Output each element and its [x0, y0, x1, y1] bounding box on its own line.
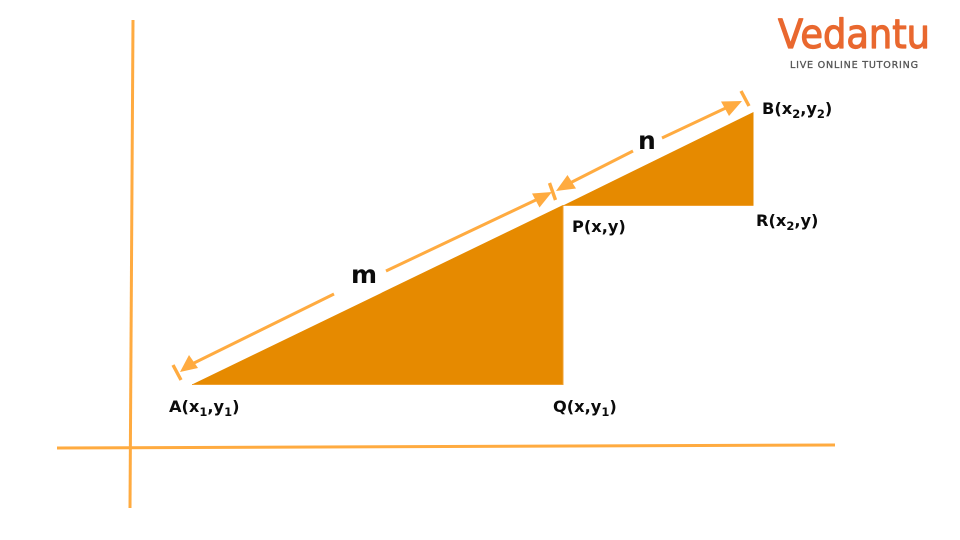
y axis — [130, 20, 133, 508]
arrow: length n — [556, 91, 749, 191]
label A: 1 — [199, 405, 207, 419]
label m: m — [351, 260, 377, 289]
large triangle APQ — [192, 205, 563, 384]
label R: R(x — [756, 211, 786, 230]
small triangle PBR — [563, 112, 754, 206]
label A: ) — [232, 397, 240, 416]
logo wordmark: Vedantu — [778, 12, 930, 58]
x axis — [57, 445, 835, 448]
label A: ,y — [207, 397, 225, 416]
triangle edge highlights — [192, 206, 754, 384]
label B: ) — [825, 99, 832, 118]
label B: B(x — [762, 99, 792, 118]
label Q: Q(x,y — [553, 397, 601, 416]
label Q: 1 — [601, 405, 609, 419]
arrow: length m — [173, 183, 556, 380]
label B: ,y — [800, 99, 817, 118]
label R: 2 — [786, 219, 794, 233]
label R: ,y) — [794, 211, 818, 230]
logo: Vedantu — [778, 12, 930, 71]
label P: P(x,y) — [572, 217, 626, 236]
label A: A(x — [169, 397, 199, 416]
logo tagline: LIVE ONLINE TUTORING — [790, 60, 918, 71]
label B: 2 — [792, 107, 800, 121]
label B: 2 — [817, 107, 825, 121]
label n: n — [638, 126, 656, 155]
label A: 1 — [224, 405, 232, 419]
label Q: ) — [609, 397, 617, 416]
